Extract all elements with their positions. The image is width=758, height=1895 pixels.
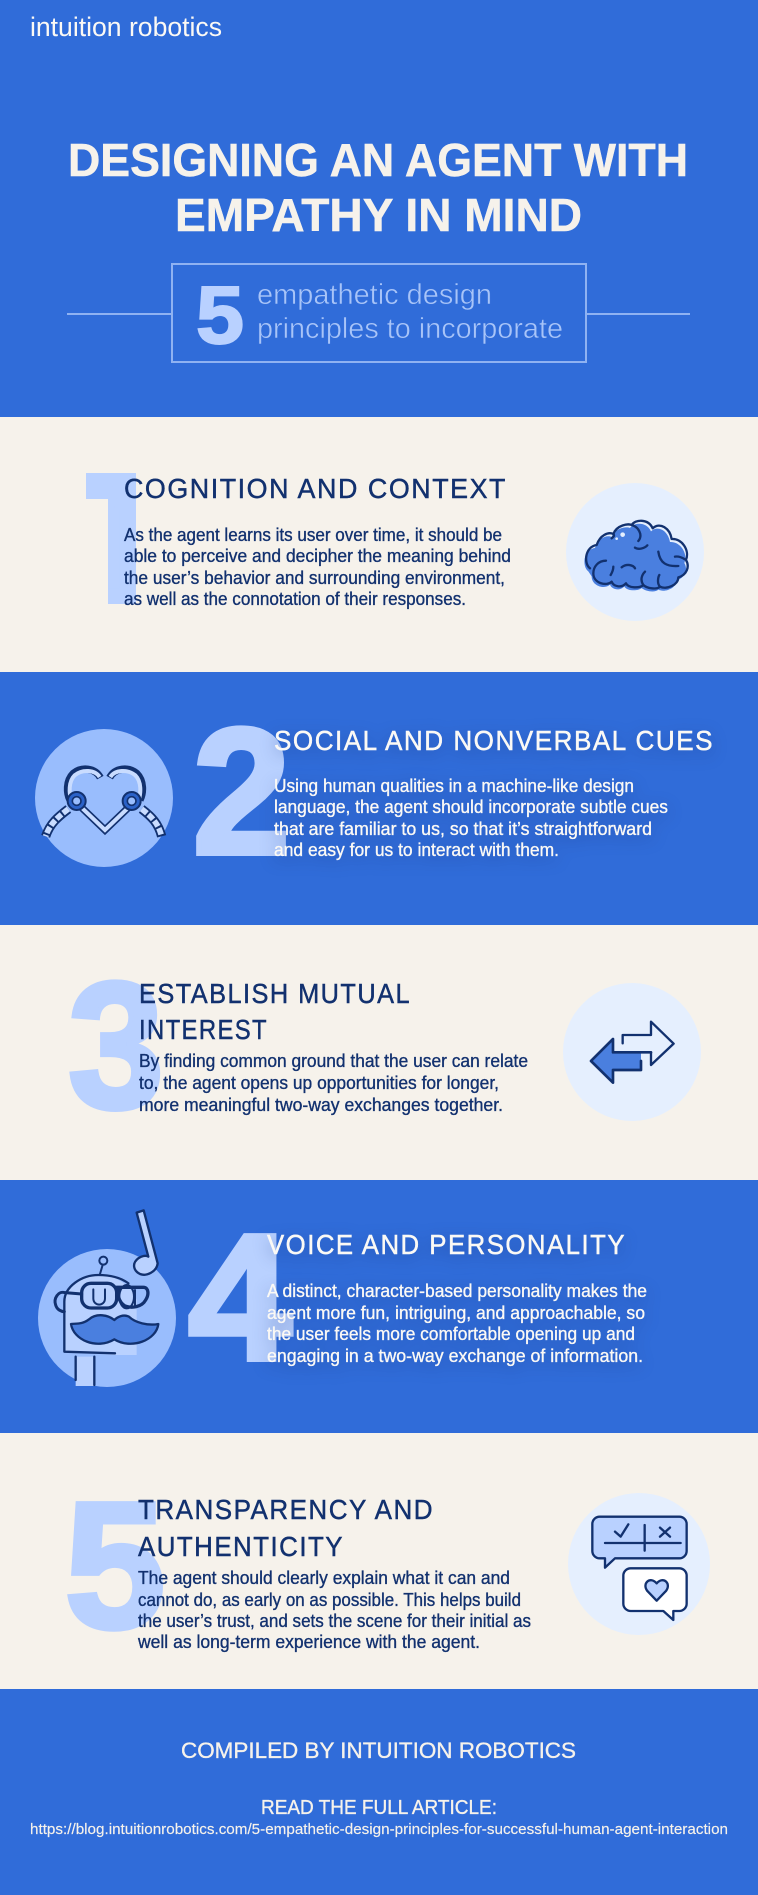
number 4: 4 bbox=[188, 1198, 292, 1398]
panel: header bbox=[0, 0, 758, 417]
number 1 bbox=[86, 473, 136, 604]
body text bbox=[267, 1280, 647, 1366]
body text: By finding common ground that the user can relate bbox=[139, 1050, 528, 1071]
heading bbox=[139, 978, 411, 1045]
heading: AUTHENTICITY bbox=[138, 1531, 344, 1562]
body text: as well as the connotation of their responses. bbox=[124, 588, 466, 609]
number 3: 3 bbox=[68, 946, 164, 1146]
panel: social and nonverbal cues bbox=[0, 672, 758, 925]
body text: cannot do, as early on as possible. This helps build bbox=[138, 1589, 521, 1610]
title bbox=[68, 134, 688, 241]
heading: ESTABLISH MUTUAL bbox=[139, 978, 411, 1009]
read more label: READ THE FULL ARTICLE: bbox=[261, 1796, 497, 1819]
body text: and easy for us to interact with them. bbox=[274, 839, 559, 860]
body text: well as long-term experience with the agent. bbox=[137, 1631, 480, 1652]
heading: TRANSPARENCY AND bbox=[138, 1494, 434, 1525]
panel: voice and personality bbox=[0, 1180, 758, 1433]
body text bbox=[139, 1050, 528, 1115]
body text: language, the agent should incorporate subtle cues bbox=[274, 796, 668, 817]
subtitle box: principles to incorporate bbox=[257, 313, 563, 345]
body text: As the agent learns its user over time, it should be bbox=[124, 524, 502, 545]
heading: VOICE AND PERSONALITY bbox=[267, 1229, 626, 1260]
title: DESIGNING AN AGENT WITH bbox=[68, 134, 688, 186]
title: EMPATHY IN MIND bbox=[175, 189, 582, 241]
heading: INTEREST bbox=[139, 1014, 268, 1045]
icon: robot with glasses and mustache bbox=[38, 1210, 176, 1387]
subtitle box bbox=[67, 264, 690, 362]
heading: COGNITION AND CONTEXT bbox=[124, 473, 507, 504]
number 2: 2 bbox=[192, 692, 290, 892]
icon: brain bbox=[566, 483, 704, 621]
heading: SOCIAL AND NONVERBAL CUES bbox=[274, 725, 714, 756]
panel: cognition and context bbox=[0, 417, 758, 672]
body text: the user’s trust, and sets the scene for their initial as bbox=[138, 1610, 531, 1631]
body text: Using human qualities in a machine-like design bbox=[274, 775, 634, 796]
body text: engaging in a two-way exchange of information. bbox=[267, 1345, 643, 1366]
heading bbox=[138, 1494, 434, 1562]
body text: agent more fun, intriguing, and approachable, so bbox=[267, 1302, 645, 1323]
body text: that are familiar to us, so that it’s straightforward bbox=[274, 818, 652, 839]
panel: establish mutual interest bbox=[0, 925, 758, 1180]
body text: the user feels more comfortable opening up and bbox=[267, 1323, 635, 1344]
icon: speech bubbles bbox=[568, 1493, 710, 1635]
body text: more meaningful two-way exchanges together. bbox=[139, 1094, 503, 1115]
body text: to, the agent opens up opportunities for longer, bbox=[139, 1072, 499, 1093]
panel: transparency and authenticity bbox=[0, 1433, 758, 1689]
article url: https://blog.intuitionrobotics.com/5-empathetic-design-principles-for-successful-human-agent-interaction bbox=[30, 1821, 728, 1838]
credit line: COMPILED BY INTUITION ROBOTICS bbox=[181, 1738, 576, 1763]
body text: The agent should clearly explain what it can and bbox=[138, 1567, 510, 1588]
number 5: 5 bbox=[64, 1466, 166, 1666]
icon: robot arms heart bbox=[35, 729, 173, 867]
subtitle box: empathetic design bbox=[257, 279, 492, 311]
panel: footer bbox=[0, 1689, 758, 1895]
logo: intuition robotics bbox=[30, 12, 222, 42]
body text bbox=[124, 524, 511, 609]
body text bbox=[274, 775, 668, 860]
body text: A distinct, character-based personality makes the bbox=[267, 1280, 647, 1301]
body text bbox=[137, 1567, 531, 1652]
number 1: 1 bbox=[75, 442, 175, 643]
body text: the user’s behavior and surrounding environment, bbox=[124, 567, 505, 588]
subtitle box: 5 bbox=[196, 270, 244, 361]
body text: able to perceive and decipher the meaning behind bbox=[124, 545, 511, 566]
icon: exchange arrows bbox=[563, 983, 701, 1121]
